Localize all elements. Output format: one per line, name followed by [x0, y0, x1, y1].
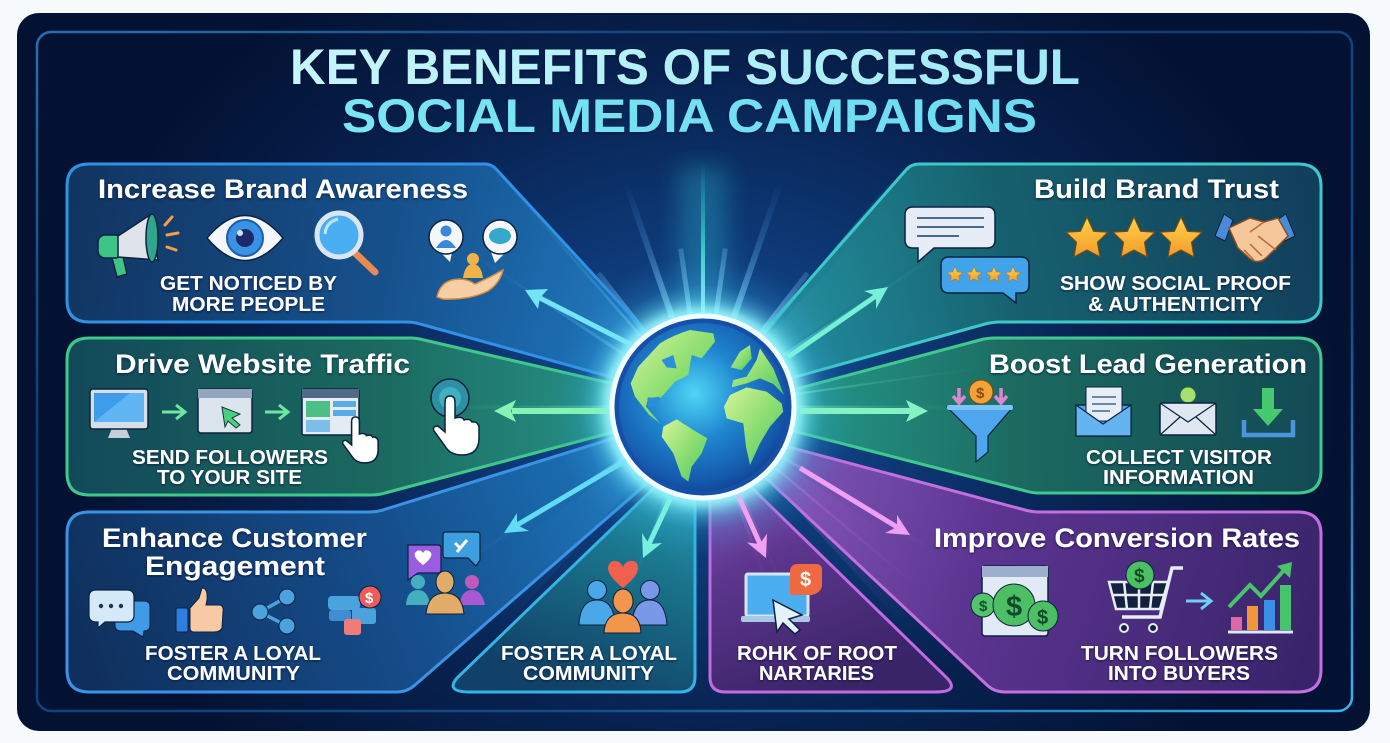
icon: lead funnel: $ [976, 385, 985, 402]
arrow: to brand trust [788, 287, 888, 357]
icon: chat bubbles [89, 590, 150, 637]
glow around globe [553, 257, 853, 557]
icon: laptop with cursor and dollar [741, 564, 822, 634]
caption: COMMUNITY [523, 663, 655, 685]
arrow [162, 405, 185, 419]
heading: Enhance Customer [102, 523, 368, 553]
caption: MORE PEOPLE [172, 294, 325, 316]
caption: SEND FOLLOWERS [132, 447, 328, 469]
icon: web page with pointer [302, 389, 378, 463]
caption: SHOW SOCIAL PROOF [1060, 273, 1291, 295]
caption: INTO BUYERS [1108, 663, 1250, 685]
icon: shopping cart [1109, 561, 1183, 632]
panel: boost lead generation [770, 338, 1321, 493]
caption: NARTARIES [759, 663, 874, 685]
panel: foster a loyal community [453, 463, 697, 692]
arrow: to lead generation [800, 400, 928, 422]
icon: growth chart [1228, 562, 1293, 632]
icon: shopping cart: $ [1134, 566, 1145, 587]
heading: Build Brand Trust [1034, 174, 1279, 204]
title: SOCIAL MEDIA CAMPAIGNS [342, 90, 1037, 143]
light rays behind panels [403, 162, 1003, 689]
caption: ROHK OF ROOT [737, 643, 897, 665]
heading: Engagement [145, 551, 325, 581]
arrow: to conversion rates [800, 468, 910, 535]
arrow: to customer engagement [504, 458, 630, 533]
caption [501, 643, 677, 685]
caption [737, 643, 897, 685]
icon: eye [207, 216, 283, 260]
icon: browser with cursor [198, 389, 252, 433]
arrow [265, 405, 288, 419]
caption: COMMUNITY [167, 663, 301, 685]
panel: improve conversion rates [750, 442, 1321, 692]
title [290, 39, 1080, 143]
caption [1060, 273, 1291, 316]
title: KEY BENEFITS OF SUCCESSFUL [290, 39, 1080, 95]
panel: rohk of root nartaries [710, 462, 951, 692]
icon: audience in hand [429, 220, 517, 299]
icon: review bubble [905, 207, 995, 262]
icon: laptop with cursor and dollar: $ [800, 569, 811, 591]
icon: browser with coins: $ [1037, 607, 1048, 629]
icon: open envelope [1076, 387, 1131, 436]
icon: handshake [1215, 214, 1295, 262]
icon: lead funnel [947, 380, 1013, 462]
icon: magnifying glass [317, 213, 375, 272]
icon: browser with coins: $ [1006, 591, 1022, 623]
heading: Increase Brand Awareness [98, 174, 468, 204]
icon: share [252, 589, 295, 634]
icon: people with heart [579, 561, 667, 633]
caption: COLLECT VISITOR [1086, 447, 1273, 469]
icon: megaphone [98, 214, 178, 277]
panel: increase brand awareness [67, 164, 660, 385]
arrow: to loyal community [642, 495, 672, 558]
caption [145, 643, 321, 685]
caption: TURN FOLLOWERS [1081, 643, 1278, 665]
panel: drive website traffic [67, 338, 640, 495]
caption [160, 273, 338, 316]
caption [132, 447, 328, 489]
icon: browser with coins [971, 566, 1058, 636]
icon: thumbs up [176, 588, 223, 632]
panel: enhance customer engagement [67, 430, 660, 692]
heading: Drive Website Traffic [115, 349, 410, 379]
icon: browser with coins: $ [979, 598, 988, 615]
panel: build brand trust [745, 164, 1321, 384]
icon: community with messages [406, 532, 485, 614]
caption [1086, 447, 1273, 489]
icon: social cluster [328, 586, 381, 635]
caption: TO YOUR SITE [157, 467, 302, 489]
caption: GET NOTICED BY [160, 273, 338, 295]
icon: three stars [1066, 217, 1202, 257]
globe [609, 313, 797, 501]
icon: monitor [90, 389, 148, 438]
arrow: to website traffic [494, 400, 609, 422]
caption: FOSTER A LOYAL [145, 643, 321, 665]
icon: tap target hand [431, 379, 479, 455]
icon: social cluster: $ [365, 590, 374, 607]
arrow [1186, 593, 1211, 609]
heading [102, 523, 368, 581]
icon: envelope with smiley [1160, 387, 1216, 435]
arrow: to brand awareness [525, 289, 630, 344]
caption: INFORMATION [1103, 467, 1254, 489]
caption: & AUTHENTICITY [1088, 294, 1264, 316]
heading: Boost Lead Generation [989, 349, 1307, 379]
icon: download [1244, 388, 1293, 435]
caption: FOSTER A LOYAL [501, 643, 677, 665]
arrow: to root narratives [738, 495, 767, 558]
icon: star rating bubble [941, 257, 1029, 303]
heading: Improve Conversion Rates [934, 523, 1300, 553]
caption [1081, 643, 1278, 685]
